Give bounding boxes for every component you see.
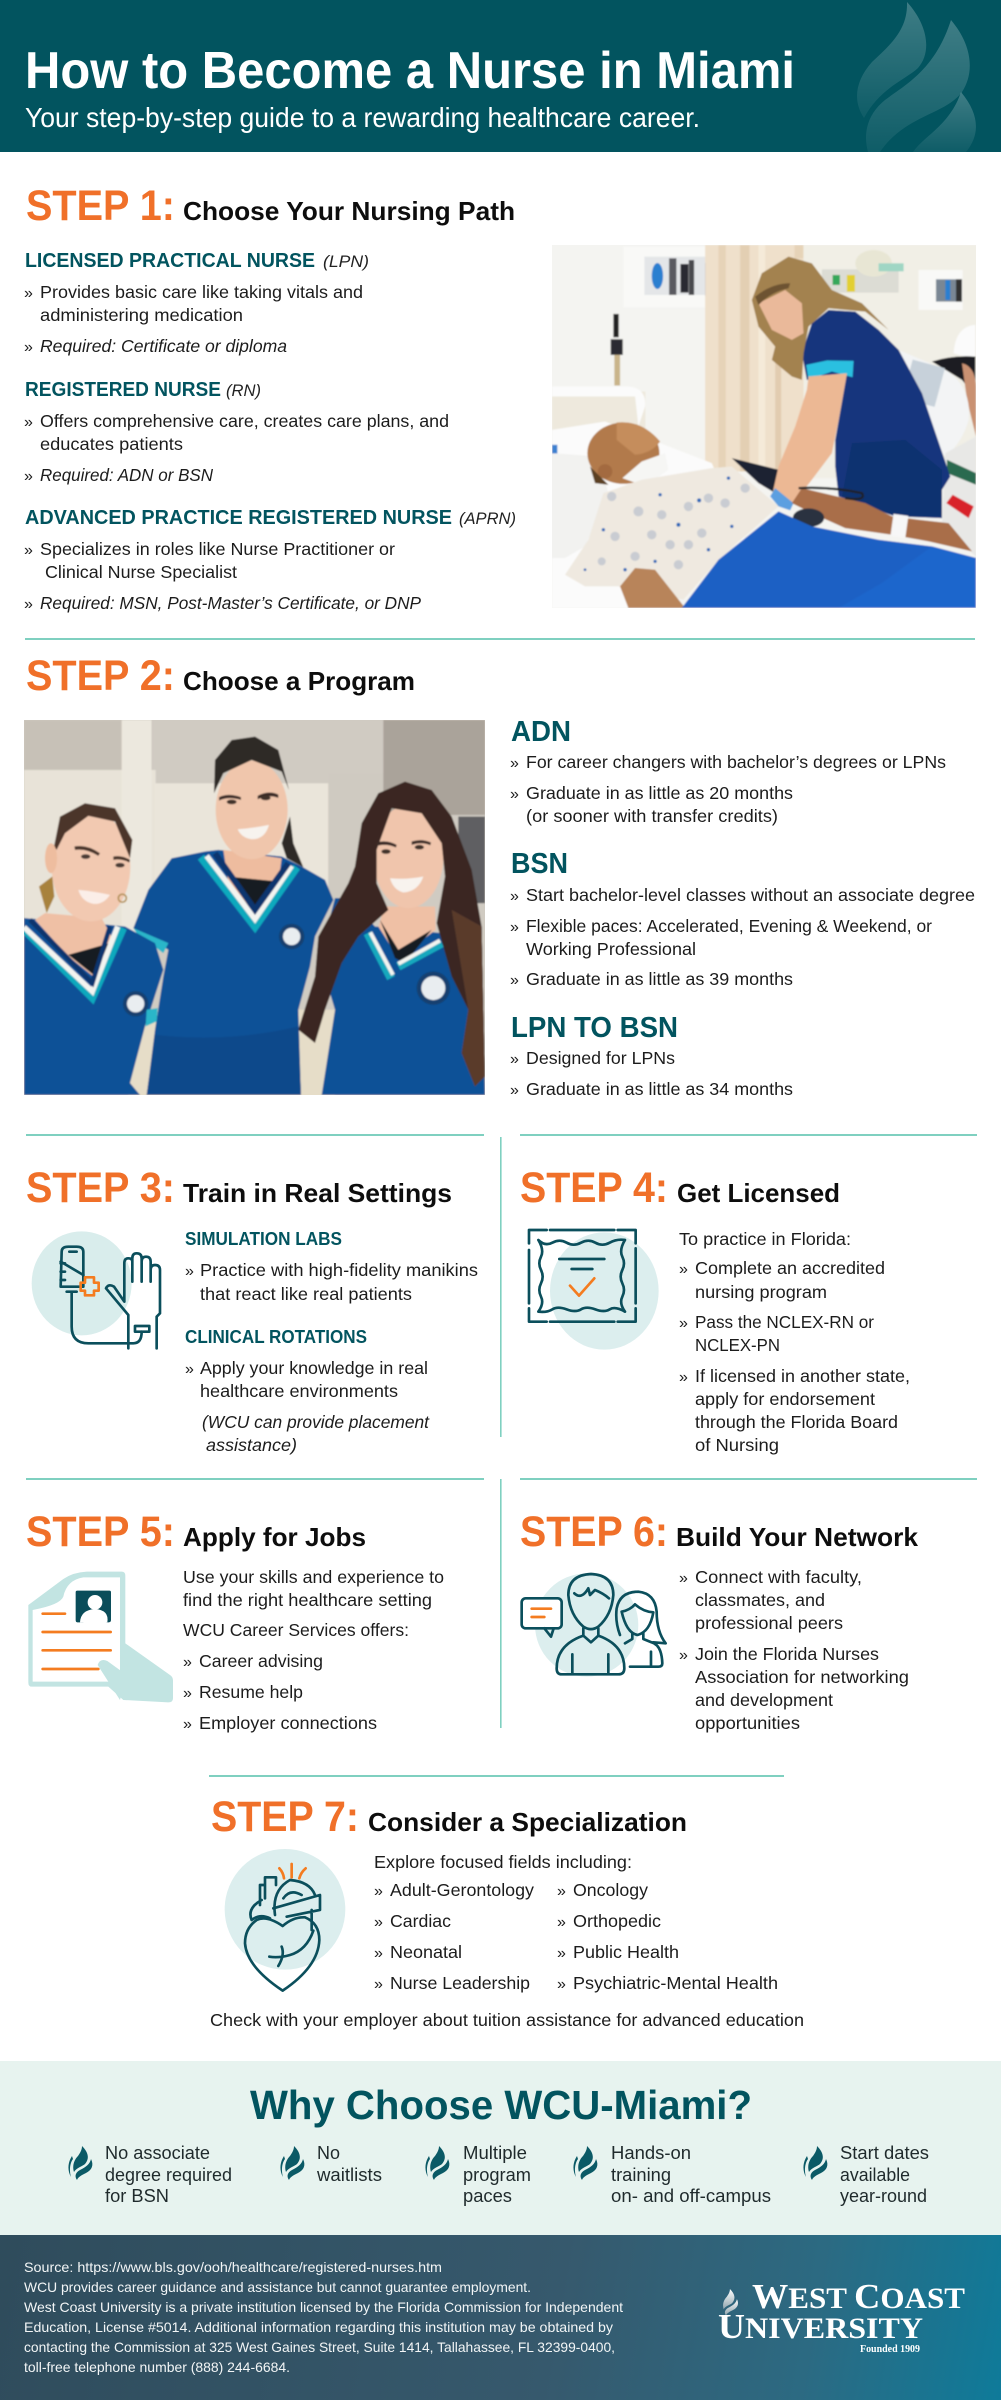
text block: networking: » (679, 1647, 688, 1664)
text block: licensing requirements: NCLEX-PN (695, 1335, 780, 1355)
icon: anatomical heart (225, 1849, 345, 1991)
text block: specialization fields: Nurse Leadership (390, 1973, 530, 1993)
text block: licensing requirements: If licensed in another state, (695, 1366, 910, 1386)
text block: LPN: » (24, 339, 33, 356)
heading: step 4 (520, 1164, 840, 1212)
text block: APRN: (APRN) (459, 509, 516, 528)
text block: BSN (510, 848, 975, 989)
text block: APRN: » (24, 542, 33, 559)
text block: specialization fields: » (374, 1945, 383, 1962)
text block: specialization fields: Neonatal (390, 1942, 462, 1962)
text block: BSN: » (510, 888, 519, 905)
text block: clinical rotations: » (185, 1361, 194, 1378)
text block: licensing requirements: » (679, 1369, 688, 1386)
text block: RN (24, 379, 449, 485)
benefit: no associate degree: degree required (105, 2165, 232, 2185)
text block: ADN: » (510, 786, 519, 803)
text block: BSN: BSN (511, 848, 568, 880)
text block: ADN: (or sooner with transfer credits) (526, 806, 778, 826)
text block: specialization fields: » (374, 1914, 383, 1931)
heading: step 4: STEP 4: (520, 1164, 668, 1212)
heading: step 2: STEP 2: (26, 652, 175, 700)
text block: simulation labs: Practice with high-fidelity manikins (200, 1260, 478, 1280)
text block: licensing requirements: of Nursing (695, 1435, 779, 1455)
text block: career services (183, 1567, 444, 1733)
heading: step 4: Get Licensed (677, 1178, 840, 1208)
text block: specialization fields: » (557, 1976, 566, 1993)
heading: step 2: Choose a Program (183, 666, 415, 696)
text block: sources and disclosures: West Coast University is a private institution licensed by the Florida Commission for Independent (24, 2299, 623, 2315)
text block: RN: » (24, 414, 33, 431)
benefit: start dates: year-round (840, 2186, 927, 2206)
text block: LPN to BSN: LPN TO BSN (511, 1012, 678, 1044)
divider (25, 638, 975, 640)
text block: LPN: (LPN) (323, 252, 369, 271)
text block: LPN to BSN: Graduate in as little as 34 months (526, 1079, 793, 1099)
text block: networking: professional peers (695, 1613, 843, 1633)
benefit: start dates (803, 2143, 929, 2206)
text block: simulation labs (185, 1229, 478, 1304)
heading: step 3 (26, 1164, 452, 1212)
text block: RN: educates patients (40, 434, 183, 454)
text block: career services: » (183, 1685, 192, 1702)
logo: West Coast University: Founded 1909 (860, 2344, 920, 2355)
text block: specialization fields: » (374, 1883, 383, 1900)
heading: step 1: STEP 1: (26, 182, 175, 230)
icon: license certificate (529, 1230, 659, 1350)
icon: header flame watermark (857, 2, 976, 152)
text block: RN: (RN) (226, 381, 261, 400)
text block: specialization fields: Oncology (573, 1880, 648, 1900)
text block: APRN: » (24, 596, 33, 613)
subtitle: Your step-by-step guide to a rewarding healthcare career. (25, 102, 700, 133)
benefit: multiple paces: paces (463, 2186, 512, 2206)
panel: step 6 (520, 1508, 919, 1733)
logo: West Coast University: UNIVERSITY (718, 2307, 923, 2346)
text block: simulation labs: » (185, 1263, 194, 1280)
benefit: no waitlists: waitlists (316, 2165, 382, 2185)
icon: resume held in hand (28, 1572, 173, 1702)
text block: clinical rotations: (WCU can provide placement (202, 1412, 430, 1432)
text block: sources and disclosures (24, 2259, 623, 2375)
heading: step 6 (520, 1508, 919, 1556)
text block: licensing requirements: » (679, 1261, 688, 1278)
benefit: multiple paces (425, 2143, 531, 2206)
text block: BSN: » (510, 972, 519, 989)
photo: three nursing students (24, 720, 485, 1095)
panel: step 7 (210, 1793, 804, 2030)
text block: clinical rotations: assistance) (206, 1435, 297, 1455)
benefit: hands-on training: training (611, 2165, 671, 2185)
text block: BSN: Flexible paces: Accelerated, Evening & Weekend, or (526, 916, 932, 936)
text block: sources and disclosures: contacting the Commission at 325 West Gaines Street, Suite 1414, Tallahassee, FL 32399-0400, (24, 2339, 615, 2355)
text block: APRN: Required: MSN, Post-Master’s Certificate, or DNP (40, 593, 421, 613)
text block: sources and disclosures: Education, License #5014. Additional information regarding this institution may be obtained by (24, 2319, 613, 2335)
text block: licensing requirements: Pass the NCLEX-RN or (695, 1312, 874, 1332)
text block: career services: find the right healthcare setting (183, 1590, 432, 1610)
text block: licensing requirements: through the Florida Board (695, 1412, 898, 1432)
text block: ADN: For career changers with bachelor’s degrees or LPNs (526, 752, 946, 772)
text: tuition note: Check with your employer about tuition assistance for advanced education (210, 2010, 804, 2030)
text block: simulation labs: SIMULATION LABS (185, 1229, 342, 1249)
heading: step 3: Train in Real Settings (183, 1178, 452, 1208)
text block: specialization fields: Orthopedic (573, 1911, 661, 1931)
footer (0, 2235, 1001, 2400)
text block: LPN to BSN (510, 1012, 793, 1099)
text block: networking: » (679, 1570, 688, 1587)
heading: step 7: Consider a Specialization (368, 1807, 687, 1837)
heading: why choose: Why Choose WCU-Miami? (250, 2082, 752, 2128)
text block: specialization fields: Adult-Gerontology (390, 1880, 534, 1900)
heading: step 1: Choose Your Nursing Path (183, 196, 515, 226)
heading: step 6: STEP 6: (520, 1508, 668, 1556)
text block: career services: Resume help (199, 1682, 303, 1702)
text block: career services: » (183, 1654, 192, 1671)
text block: BSN: Graduate in as little as 39 months (526, 969, 793, 989)
panel: step 3 (26, 1164, 478, 1455)
text block: licensing requirements: » (679, 1315, 688, 1332)
benefit: hands-on training (573, 2143, 771, 2206)
text block: RN: Offers comprehensive care, creates care plans, and (40, 411, 449, 431)
heading: step 5: STEP 5: (26, 1508, 175, 1556)
text block: LPN: Provides basic care like taking vitals and (40, 282, 363, 302)
text block: LPN: » (24, 285, 33, 302)
text block: APRN: Clinical Nurse Specialist (45, 562, 237, 582)
heading: step 2 (26, 652, 415, 700)
title: How to Become a Nurse in Miami (25, 42, 795, 100)
text block: clinical rotations (185, 1327, 430, 1455)
text block: simulation labs: that react like real patients (200, 1284, 412, 1304)
text block: specialization fields (374, 1852, 778, 1993)
panel: step 1 (24, 182, 985, 620)
panel: step 4 (520, 1164, 910, 1455)
text block: specialization fields: » (557, 1883, 566, 1900)
text block: ADN: » (510, 755, 519, 772)
text block: specialization fields: Psychiatric-Mental Health (573, 1973, 778, 1993)
icon: IV bag and hand (32, 1231, 160, 1348)
text block: RN: » (24, 468, 33, 485)
text block: licensing requirements: apply for endorsement (695, 1389, 875, 1409)
text block: networking: classmates, and (695, 1590, 825, 1610)
text block: career services: » (183, 1716, 192, 1733)
text block: specialization fields: Cardiac (390, 1911, 451, 1931)
text block: LPN to BSN: » (510, 1082, 519, 1099)
text block: career services: Use your skills and experience to (183, 1567, 444, 1587)
panel: step 2 (15, 652, 975, 1110)
text block: specialization fields: » (557, 1914, 566, 1931)
text block: sources and disclosures: toll-free telephone number (888) 244-6684. (24, 2359, 290, 2375)
text block: RN: Required: ADN or BSN (40, 465, 213, 485)
text block: career services: Career advising (199, 1651, 323, 1671)
text block: LPN: LICENSED PRACTICAL NURSE (25, 250, 315, 272)
benefit: no associate degree: for BSN (105, 2186, 169, 2206)
text block: licensing requirements: To practice in Florida: (679, 1229, 851, 1249)
benefit: start dates: available (840, 2165, 910, 2185)
header banner (0, 0, 1001, 152)
text block: career services: WCU Career Services offers: (183, 1620, 409, 1640)
benefit: multiple paces: Multiple (463, 2143, 527, 2163)
benefit: hands-on training: Hands-on (611, 2143, 691, 2163)
panel: why choose WCU-Miami (0, 2061, 1001, 2235)
text block: networking: and development (695, 1690, 833, 1710)
text block: specialization fields: » (557, 1945, 566, 1962)
text block: ADN (510, 716, 946, 826)
text block: networking: Connect with faculty, (695, 1567, 862, 1587)
icon: networking people (522, 1573, 666, 1677)
logo: West Coast University: WEST COAST (752, 2277, 965, 2316)
text block: networking: Join the Florida Nurses (695, 1644, 879, 1664)
panel: step 5 (26, 1508, 444, 1733)
heading: step 1 (26, 182, 515, 230)
benefit: no waitlists (280, 2143, 382, 2185)
text block: LPN (24, 250, 369, 356)
text block: RN: REGISTERED NURSE (25, 379, 221, 401)
text block: licensing requirements (679, 1229, 910, 1455)
text block: APRN (24, 507, 516, 613)
text block: networking: Association for networking (695, 1667, 909, 1687)
text block: specialization fields: Explore focused fields including: (374, 1852, 632, 1872)
text block: sources and disclosures: WCU provides career guidance and assistance but cannot guarantee employment. (24, 2279, 531, 2295)
benefit: no associate degree: No associate (105, 2143, 210, 2163)
text block: networking (679, 1567, 909, 1733)
text block: licensing requirements: Complete an accredited (695, 1258, 885, 1278)
text block: networking: opportunities (695, 1713, 800, 1733)
text block: specialization fields: Public Health (573, 1942, 679, 1962)
heading: step 3: STEP 3: (26, 1164, 175, 1212)
heading: step 5 (26, 1508, 366, 1556)
text block: APRN: ADVANCED PRACTICE REGISTERED NURSE (25, 507, 452, 529)
text block: career services: Employer connections (199, 1713, 377, 1733)
text block: BSN: Start bachelor-level classes without an associate degree (526, 885, 975, 905)
benefit: no associate degree (68, 2143, 232, 2206)
text block: BSN: Working Professional (526, 939, 696, 959)
heading: step 6: Build Your Network (676, 1522, 919, 1552)
text block: ADN: ADN (511, 716, 571, 748)
heading: step 7 (211, 1793, 687, 1841)
heading: step 5: Apply for Jobs (183, 1522, 366, 1552)
text block: LPN to BSN: » (510, 1051, 519, 1068)
text block: LPN: administering medication (40, 305, 243, 325)
text block: clinical rotations: healthcare environments (200, 1381, 398, 1401)
text block: clinical rotations: CLINICAL ROTATIONS (185, 1327, 367, 1347)
text block: clinical rotations: Apply your knowledge in real (200, 1358, 428, 1378)
text block: ADN: Graduate in as little as 20 months (526, 783, 793, 803)
photo: nurse with manikin (552, 245, 976, 608)
text block: sources and disclosures: Source: https://www.bls.gov/ooh/healthcare/registered-nurses.htm (24, 2259, 442, 2275)
logo: West Coast University (718, 2277, 965, 2355)
text block: specialization fields: » (374, 1976, 383, 1993)
text block: BSN: » (510, 919, 519, 936)
benefit: no waitlists: No (317, 2143, 340, 2163)
heading: step 7: STEP 7: (211, 1793, 359, 1841)
benefit: multiple paces: program (463, 2165, 531, 2185)
text block: licensing requirements: nursing program (695, 1282, 827, 1302)
benefit: hands-on training: on- and off-campus (611, 2186, 771, 2206)
benefit: start dates: Start dates (840, 2143, 929, 2163)
text block: LPN to BSN: Designed for LPNs (526, 1048, 675, 1068)
text block: APRN: Specializes in roles like Nurse Practitioner or (40, 539, 395, 559)
text block: LPN: Required: Certificate or diploma (40, 336, 287, 356)
